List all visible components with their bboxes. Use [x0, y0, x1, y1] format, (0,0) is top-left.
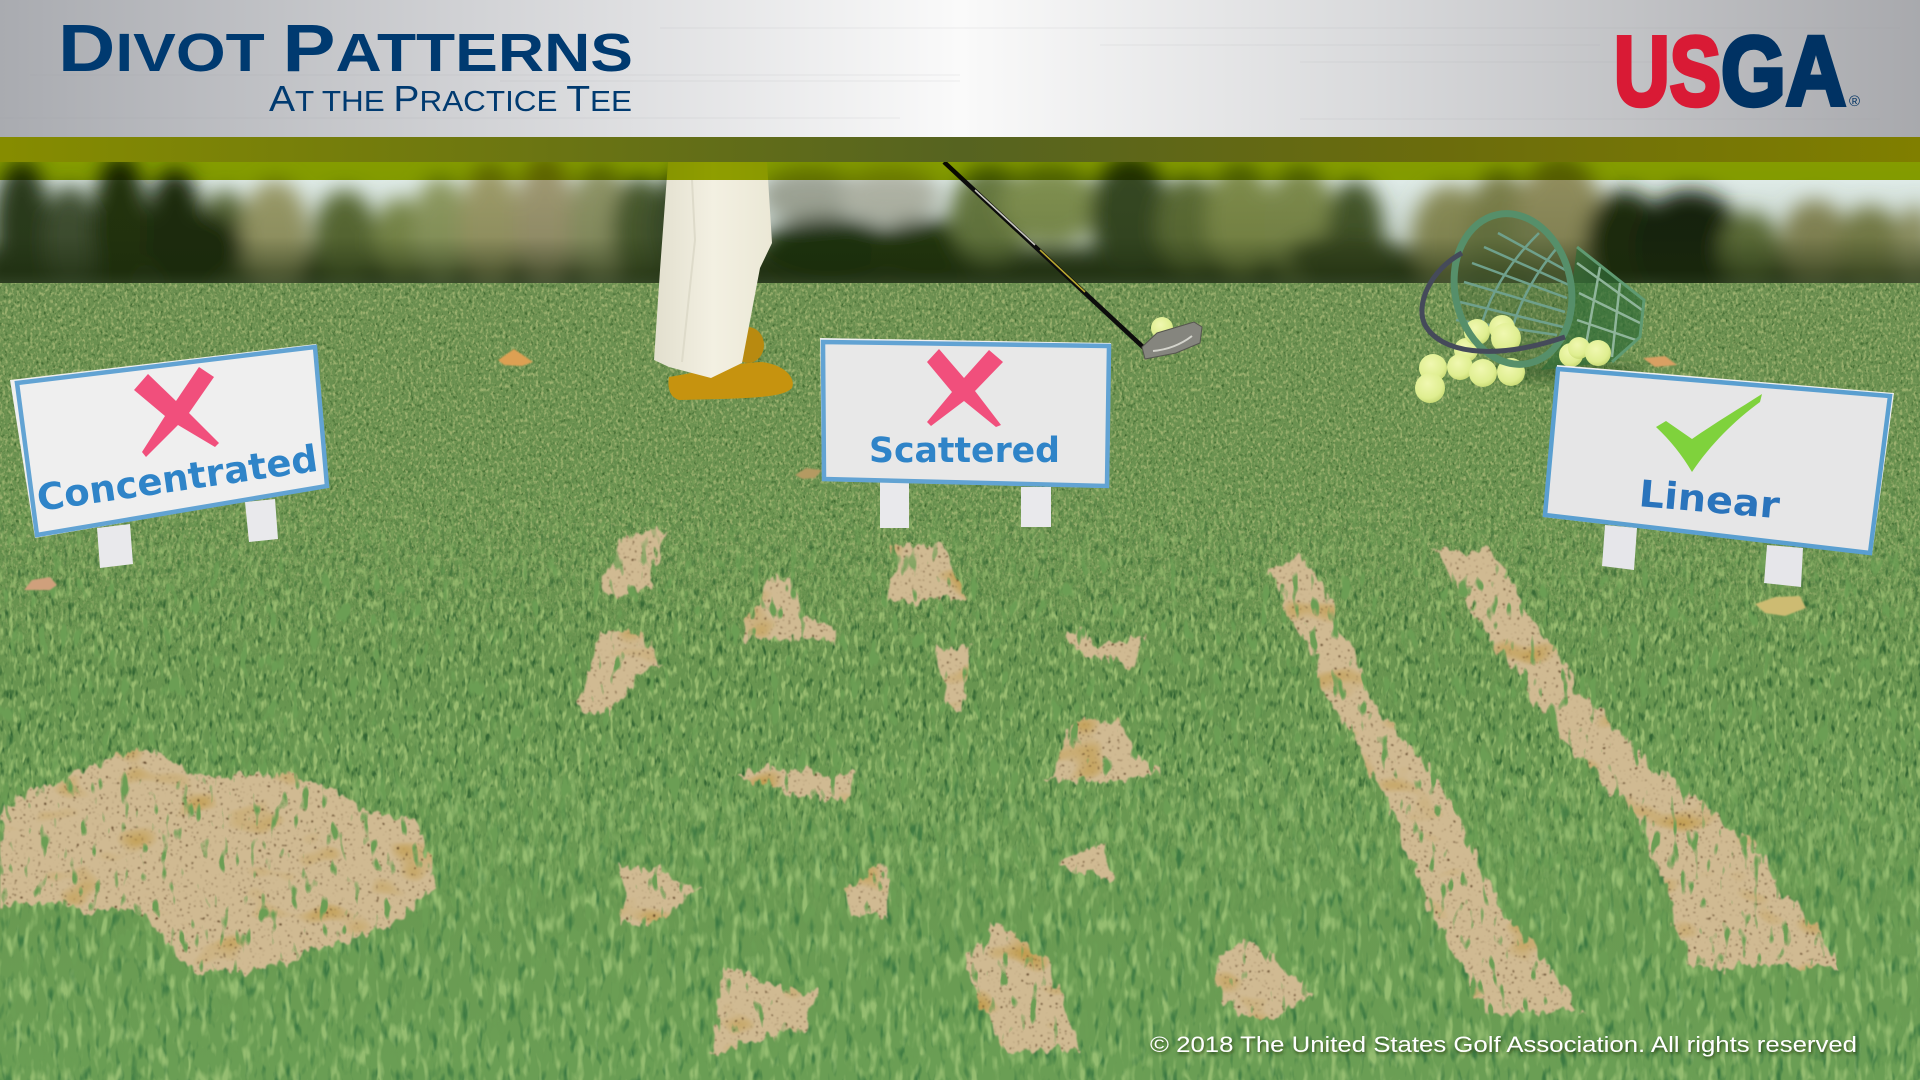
green check mark	[1656, 394, 1762, 472]
basket interior grid	[1444, 206, 1582, 372]
pants	[654, 162, 772, 378]
header bar	[0, 0, 1920, 137]
range ball basket with spilled balls	[1415, 203, 1645, 403]
sign posts	[880, 482, 909, 528]
USGA logo: ®	[1849, 93, 1860, 110]
golfer legs and shoes	[654, 162, 793, 400]
USGA logo: US	[1614, 16, 1721, 126]
solid olive band	[0, 137, 1920, 162]
front shoe	[668, 362, 793, 400]
USGA logo: GA	[1721, 16, 1846, 126]
golf club and ball	[944, 162, 1202, 359]
copyright: © 2018 The United States Golf Association. All rights reserved	[1150, 1032, 1857, 1057]
sign posts	[97, 524, 133, 568]
red cross	[134, 367, 219, 457]
spilled balls	[1415, 315, 1611, 403]
scattered divots	[576, 529, 1316, 1053]
sign label: Scattered	[869, 431, 1060, 471]
blurred tree line background	[0, 137, 1920, 306]
sign: concentrated	[10, 344, 329, 568]
USGA logo	[1614, 16, 1860, 126]
translucent olive band over scene	[0, 162, 1920, 180]
linear divot strips	[1273, 551, 1843, 1016]
sign: linear	[1543, 365, 1894, 587]
sign label: Linear	[1637, 472, 1782, 527]
grass tufts over divots	[0, 500, 1920, 1080]
title: DIVOT PATTERNS	[58, 11, 633, 86]
sign board	[820, 338, 1111, 488]
sign board	[10, 344, 329, 538]
grass field	[0, 283, 1920, 1080]
basket handle	[1422, 253, 1565, 351]
sign board	[1543, 365, 1894, 555]
sign: scattered	[820, 338, 1111, 528]
red cross	[927, 349, 1003, 427]
fallen leaves	[24, 349, 1806, 616]
back shoe	[732, 327, 764, 363]
sign label: Concentrated	[34, 437, 320, 520]
subtitle: AT THE PRACTICE TEE	[269, 78, 632, 119]
divot patches: concentrated, scattered, linear	[0, 529, 1843, 1053]
sign posts	[1602, 525, 1637, 570]
basket rim	[1440, 203, 1586, 375]
basket body	[1541, 247, 1644, 370]
basket shadow	[1475, 363, 1645, 381]
concentrated divot patch	[0, 750, 441, 977]
